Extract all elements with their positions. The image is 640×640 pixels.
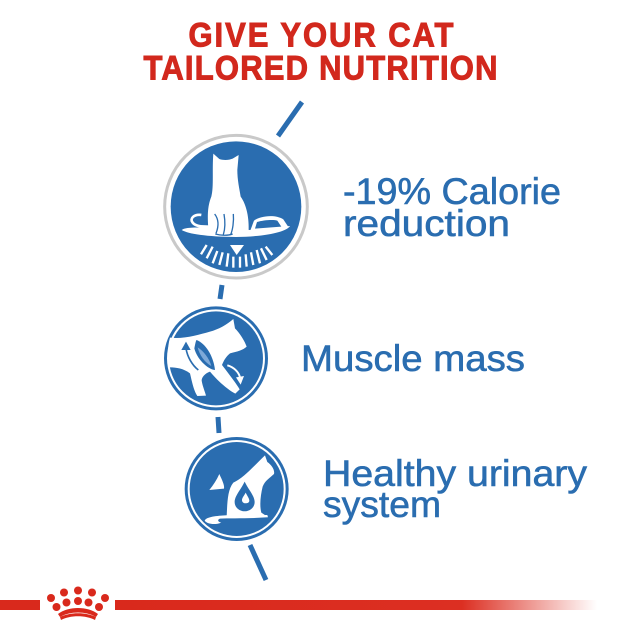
text: healthy urinary system: Healthy urinary	[323, 452, 587, 494]
connector: top dash	[278, 102, 302, 136]
logo: royal canin crown	[47, 586, 109, 620]
connector: dash between second and third icon	[218, 417, 219, 433]
connector: bottom dash	[250, 545, 266, 580]
text: calorie reduction: reduction	[343, 202, 510, 244]
text: healthy urinary system: system	[323, 483, 441, 525]
icon: cat urinary	[185, 437, 289, 541]
connector: dash between first and second icon	[220, 285, 222, 299]
icon: cat with food bowl	[165, 135, 307, 278]
text: muscle mass: Muscle mass	[301, 337, 525, 379]
title	[144, 15, 498, 87]
footer band left	[0, 600, 40, 610]
text: healthy urinary system	[323, 452, 587, 525]
text: calorie reduction	[343, 170, 561, 244]
title: TAILORED NUTRITION	[144, 48, 498, 87]
title: GIVE YOUR CAT	[188, 15, 454, 54]
footer band right	[115, 600, 597, 610]
text: calorie reduction: -19% Calorie	[343, 170, 561, 212]
icon: cat muscle	[164, 306, 268, 410]
